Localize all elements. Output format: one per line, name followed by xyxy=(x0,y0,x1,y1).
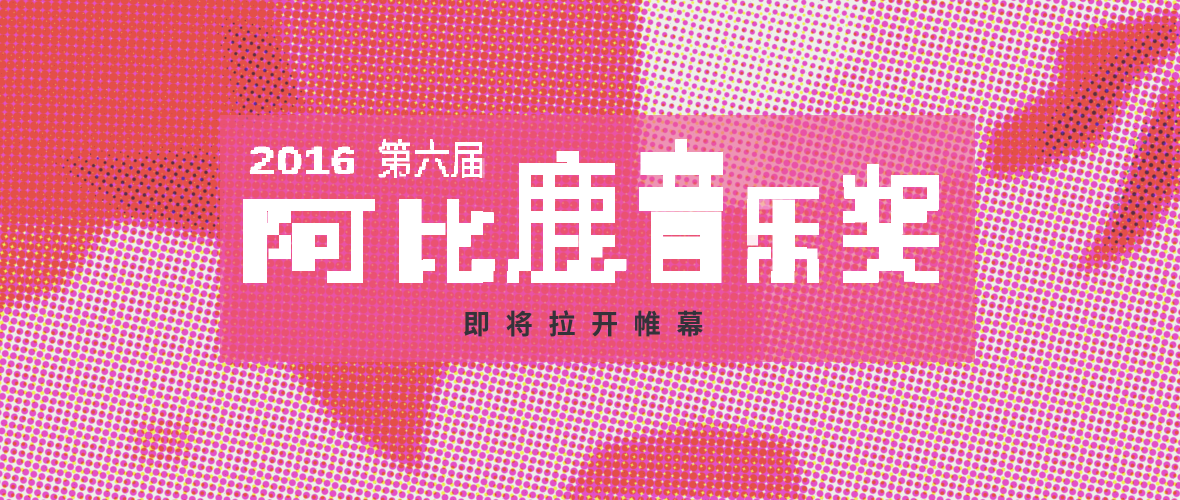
character 乐: 乐 xyxy=(741,178,823,299)
subtitle: 即将拉开帷幕: 即将拉开帷幕 xyxy=(463,309,719,340)
character 奖: 奖 xyxy=(837,162,947,300)
character 阿: 阿 xyxy=(238,193,383,296)
character 音: 音 xyxy=(636,136,732,304)
title: 阿比鹿音乐奖 xyxy=(238,136,947,304)
character 比: 比 xyxy=(391,194,496,295)
year 2016: 2016 xyxy=(249,140,358,183)
translucent central panel xyxy=(220,115,975,362)
edition 第六届: 第六届 xyxy=(377,138,488,183)
character 鹿: 鹿 xyxy=(507,142,625,303)
heading: 2016 第六届 xyxy=(249,138,488,183)
